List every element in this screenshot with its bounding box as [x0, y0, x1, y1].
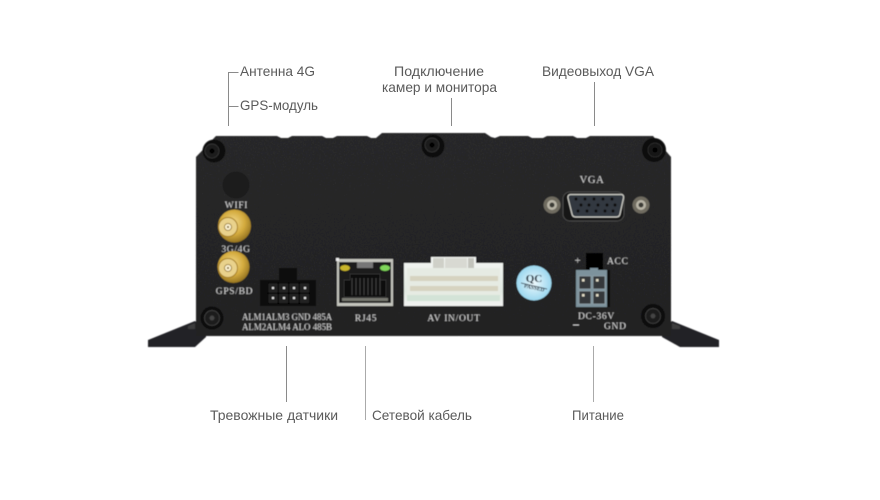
silkscreen: GPS/BD: GPS/BD — [216, 287, 253, 297]
device: DVR rear panel — [148, 133, 719, 347]
leader: network cable — [364, 346, 366, 420]
leader: alarm sensors — [286, 346, 288, 402]
connector: VGA D-sub — [544, 192, 650, 221]
label: Подключение камер и монитора: Подключение — [394, 63, 484, 79]
connector: power 4-pin — [576, 253, 610, 307]
label: Питание: Питание — [572, 407, 624, 423]
silkscreen: plus: + — [575, 255, 581, 267]
screw: top centre — [422, 134, 444, 158]
leader: power — [592, 346, 594, 402]
connector: alarm 8-pin — [260, 268, 316, 306]
silkscreen: alarm pin names: ALM1ALM3 GND 485A — [242, 313, 332, 323]
silkscreen: VGA: VGA — [580, 175, 604, 186]
silkscreen: ACC: ACC — [607, 257, 629, 267]
left mounting foot — [148, 321, 206, 347]
metal case — [196, 133, 671, 336]
connector: RJ45 — [336, 258, 393, 306]
screw: bottom right — [641, 304, 665, 328]
silkscreen: minus — [573, 324, 579, 326]
label: Подключение камер и монитора: камер и монитора — [382, 79, 497, 95]
label: Видеовыход VGA: Видеовыход VGA — [542, 63, 655, 79]
screw: top right — [642, 138, 666, 162]
connector: GPS SMA gold — [218, 251, 250, 283]
label: Сетевой кабель: Сетевой кабель — [372, 407, 472, 423]
leader: VGA — [594, 82, 596, 126]
silkscreen: GND: GND — [604, 322, 627, 332]
connector: AV IN/OUT white — [404, 257, 503, 306]
leader: camera and monitor — [450, 98, 452, 126]
silkscreen: DC-36V: DC-36V — [578, 312, 615, 322]
label: Подключение камер и монитора — [382, 63, 497, 95]
silkscreen: alarm pin names: ALM2ALM4 ALO 485B — [242, 323, 332, 333]
silkscreen: 3G/4G: 3G/4G — [221, 245, 251, 255]
silkscreen: RJ45: RJ45 — [355, 314, 377, 324]
silkscreen: AV IN/OUT: AV IN/OUT — [427, 314, 481, 324]
silkscreen: alarm pin names — [242, 313, 332, 333]
sticker: QC passed: QC — [526, 273, 542, 285]
connector: WIFI SMA gold — [218, 210, 251, 242]
label: GPS-модуль: GPS-модуль — [240, 97, 318, 113]
microphone button — [222, 172, 250, 198]
leader: antenna and GPS bracket — [228, 72, 238, 126]
sticker: QC passed: PASSED — [523, 283, 545, 294]
screw: bottom left — [200, 306, 224, 330]
screw: top left — [202, 140, 226, 162]
label: Тревожные датчики: Тревожные датчики — [210, 407, 338, 423]
silkscreen: WIFI: WIFI — [225, 201, 248, 211]
sticker: QC passed — [516, 266, 552, 300]
label: Антенна 4G: Антенна 4G — [240, 63, 315, 79]
right mounting foot — [662, 321, 719, 347]
